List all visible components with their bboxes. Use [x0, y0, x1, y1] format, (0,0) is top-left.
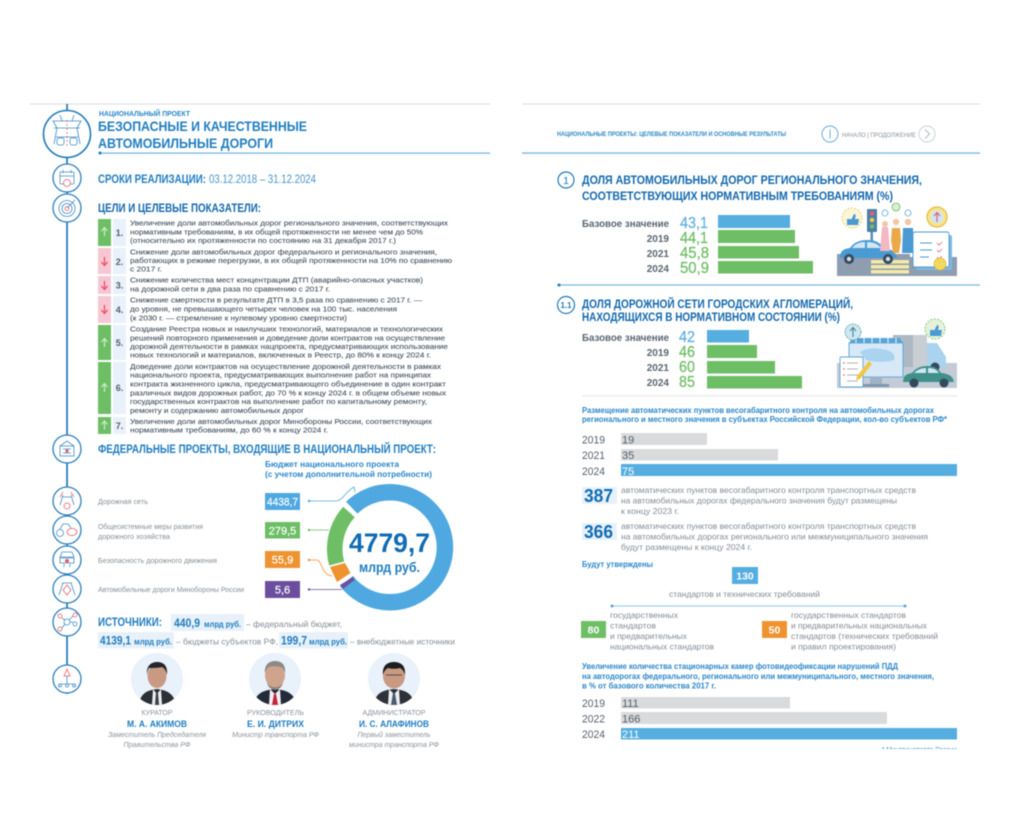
bar chart: weight control points: 75: [622, 466, 634, 478]
person caption: administrator: министра транспорта РФ: [349, 740, 439, 749]
federal project labels: Автомобильные дороги Минобороны России: [98, 586, 244, 594]
title: БЕЗОПАСНЫЕ И КАЧЕСТВЕННЫЕ: [98, 118, 307, 134]
icon: calendar: [53, 164, 81, 192]
implementation dates: 03.12.2018 – 31.12.2024: [209, 174, 316, 186]
donut chart: budget: [330, 492, 445, 602]
donut chart: budget: млрд руб.: [359, 559, 420, 575]
sources: млрд руб.: [134, 638, 172, 646]
federal project labels: [98, 499, 244, 594]
person caption: administrator: [349, 708, 439, 749]
goal 2: 2.: [116, 257, 123, 267]
budget heading: [265, 459, 432, 479]
title block: НАЦИОНАЛЬНЫЙ ПРОЕКТ: [99, 109, 190, 118]
person caption: head: Министр транспорта РФ: [232, 730, 319, 739]
section 1.1 heading: ДОЛЯ ДОРОЖНОЙ СЕТИ ГОРОДСКИХ АГЛОМЕРАЦИЙ,: [582, 298, 853, 311]
goal 6: ремонту и содержанию автомобильных дорог: [130, 406, 304, 415]
goal 1: [98, 219, 448, 246]
goal 2: Снижение доли автомобильных дорог федерального и регионального значения,: [130, 247, 437, 256]
goal 4: [98, 296, 423, 323]
section 1.1 heading: 1.1: [560, 301, 572, 310]
goal 4: Снижение смертности в результате ДТП в 3,5 раза по сравнению с 2017 г. —: [130, 296, 423, 305]
bar chart: urban agglomerations: 60: [679, 359, 695, 376]
bar chart: weight control points: 35: [622, 450, 634, 462]
person caption: head: Е. И. ДИТРИХ: [247, 719, 305, 730]
bar chart: cameras: 2019: [582, 698, 605, 710]
person caption: administrator: АДМИНИСТРАТОР: [362, 708, 426, 717]
weight control heading: Размещение автоматических пунктов весогабаритного контроля на автомобильных дорогах: [582, 406, 935, 415]
icon: road safety: [53, 546, 81, 574]
goal 7: [98, 417, 432, 435]
goal 6: Доведение доли контрактов на осуществление дорожной деятельности в рамках: [130, 362, 441, 371]
goal 6: государственных контрактов на выполнение работ по капитальному ремонту,: [130, 397, 427, 406]
bar chart: regional roads: 2024: [647, 264, 669, 275]
bar chart: weight control points: 2019: [582, 434, 605, 446]
budget value boxes: 55,9: [272, 554, 293, 566]
sources: – федеральный бюджет,: [246, 619, 342, 629]
bar chart: weight control points: [582, 433, 957, 478]
implementation dates: СРОКИ РЕАЛИЗАЦИИ:: [98, 174, 206, 186]
bar chart: cameras: 2024: [582, 729, 605, 741]
bar chart: urban agglomerations: 85: [679, 374, 695, 391]
budget value boxes: 5,6: [275, 584, 290, 596]
bar chart: cameras: 211: [622, 729, 640, 741]
sources: ИСТОЧНИКИ:: [98, 617, 162, 629]
stat: 387 points: 387: [584, 486, 613, 506]
budget heading: Бюджет национального проекта: [265, 459, 399, 469]
bar chart: urban agglomerations: [582, 329, 802, 391]
goal 3: на дорожной сети в два раза по сравнению с 2017 г.: [130, 285, 330, 294]
bar chart: urban agglomerations: 2024: [647, 378, 669, 389]
person caption: head: РУКОВОДИТЕЛЬ: [247, 708, 304, 717]
goal 6: контракта жизненного цикла, предусматривающего объединение в один контракт: [130, 380, 447, 389]
section 1 heading: 1: [563, 175, 569, 187]
sources: [98, 614, 455, 648]
implementation dates: [98, 174, 316, 186]
cameras heading: на автодорогах федерального, регионального или межмуниципального, местного значения,: [582, 672, 934, 681]
standards block: Будут утверждены: [582, 560, 653, 569]
icon: road roller: [53, 516, 81, 544]
budget value boxes: 4438,7: [267, 496, 298, 508]
budget value boxes: 279,5: [269, 526, 296, 538]
national standards count: 80: [588, 624, 599, 636]
goal 3: Снижение количества мест концентрации ДТП (аварийно-опасных участков): [130, 276, 423, 285]
icon: target: [53, 194, 81, 222]
cameras heading: в % от базового количества 2017 г.: [582, 682, 716, 690]
standards block: [581, 560, 938, 652]
goal 3: 3.: [116, 280, 123, 290]
cameras heading: Увеличение количества стационарных камер фотовидеофиксации нарушений ПДД: [582, 662, 898, 671]
icon: road: [44, 110, 90, 158]
goal 1: Увеличение доли автомобильных дорог регионального значения, соответствующих: [130, 219, 448, 228]
portrait: administrator: [368, 653, 420, 705]
bar chart: regional roads: 2019: [647, 234, 669, 245]
federal project labels: Дорожная сеть: [98, 499, 148, 506]
goal 4: 4.: [116, 305, 123, 315]
bar chart: weight control points: 2021: [582, 450, 605, 462]
icon: sources network: [53, 608, 81, 636]
federal projects heading: ФЕДЕРАЛЬНЫЕ ПРОЕКТЫ, ВХОДЯЩИЕ В НАЦИОНАЛЬНЫЙ ПРОЕКТ:: [98, 443, 436, 456]
bar chart: cameras: 166: [622, 714, 640, 726]
sources: 440,9: [174, 618, 200, 630]
stat: 366 points: будут размещены к концу 2024 г.: [621, 542, 752, 552]
portrait: curator: [131, 653, 183, 705]
national standards count: [581, 610, 715, 652]
goal 3: [98, 276, 423, 294]
bar chart: weight control points: 19: [622, 434, 634, 446]
bar chart: urban agglomerations: Базовое значение: [582, 333, 669, 344]
goal 5: решений повторного применения и доведение доли контрактов на осуществление: [130, 333, 445, 342]
cameras heading: [582, 662, 934, 690]
bar chart: regional roads: Базовое значение: [582, 219, 669, 230]
total value: 4779,7: [349, 528, 430, 558]
technical standards count: и предварительных национальных: [791, 620, 928, 630]
person caption: administrator: И. С. АЛАФИНОВ: [359, 719, 429, 730]
connectors: [308, 487, 355, 591]
person caption: administrator: Первый заместитель: [358, 730, 431, 739]
bar chart: urban agglomerations: 2021: [647, 363, 669, 374]
goal 2: работающих в режиме перегрузки, в их общей протяженности на 10% по сравнению: [130, 256, 452, 265]
bar chart: regional roads: [582, 215, 813, 277]
bar chart: cameras: 111: [622, 698, 639, 710]
bar chart: regional roads: 50,9: [680, 260, 709, 277]
section 1 heading: ДОЛЯ АВТОМОБИЛЬНЫХ ДОРОГ РЕГИОНАЛЬНОГО ЗНАЧЕНИЯ,: [582, 175, 922, 187]
sources: млрд руб.: [204, 620, 241, 629]
bar chart: regional roads: 43,1: [680, 215, 708, 232]
federal project labels: дорожного хозяйства: [98, 533, 170, 541]
divider: [559, 284, 980, 286]
footnote (cropped): [875, 747, 965, 757]
sources: – бюджеты субъектов РФ,: [176, 636, 278, 646]
sources: 4139,1: [100, 636, 132, 648]
icon: people hierarchy: [53, 665, 81, 693]
right page header: [522, 126, 980, 154]
sources: – внебюджетные источники: [350, 636, 455, 646]
section 1 heading: СООТВЕТСТВУЮЩИХ НОРМАТИВНЫМ ТРЕБОВАНИЯМ (%): [582, 191, 893, 203]
goal 4: до уровня, не превышающего четырех человек на 100 тыс. населения: [130, 305, 397, 314]
panel: goals table: [98, 219, 452, 435]
technical standards count: и правил проектирования): [791, 642, 896, 652]
right page header: НАЦИОНАЛЬНЫЕ ПРОЕКТЫ: ЦЕЛЕВЫЕ ПОКАЗАТЕЛИ И ОСНОВНЫЕ РЕЗУЛЬТАТЫ: [557, 132, 786, 138]
person caption: head: [232, 708, 319, 739]
bar chart: weight control points: 2024: [582, 466, 605, 478]
goal 4: (к 2030 г. — стремление к нулевому уровню смертности): [130, 313, 347, 322]
bar chart: cameras: [582, 697, 957, 741]
person caption: curator: КУРАТОР: [142, 708, 172, 717]
section 1 heading: [558, 172, 922, 203]
goal 7: нормативным требованиям, до 60 % к концу 2024 г.: [130, 426, 328, 435]
national standards count: и предварительных: [610, 631, 688, 641]
stat: 387 points: автоматических пунктов весогабаритного контроля транспортных средств: [621, 485, 917, 495]
goal 1: (относительно их протяженности по состоянию на 31 декабря 2017 г.): [130, 236, 396, 245]
stat: 366 points: 366: [584, 522, 613, 542]
goal 2: [98, 247, 452, 274]
national standards count: национальных стандартов: [610, 642, 715, 652]
technical standards count: стандартов (технических требований: [791, 631, 938, 641]
person caption: curator: М. А. АКИМОВ: [127, 719, 187, 730]
budget heading: (с учетом дополнительной потребности): [265, 469, 432, 479]
federal project labels: Безопасность дорожного движения: [98, 558, 217, 565]
stat: 387 points: [582, 485, 917, 516]
goal 2: с 2017 г.: [130, 265, 162, 274]
national standards count: стандартов: [610, 620, 657, 630]
goal 5: новых технологий и материалов, включенных в Реестр, до 80% к концу 2024 г.: [130, 351, 431, 360]
bar chart: regional roads: 45,8: [680, 245, 709, 262]
weight control heading: регионального и местного значения в субъектах Российской Федерации, кол-во субъектов РФ*: [582, 415, 948, 424]
person caption: curator: [108, 708, 206, 749]
illustration: monitoring scene: [837, 319, 957, 388]
stat: 366 points: автоматических пунктов весогабаритного контроля транспортных средств: [621, 521, 917, 531]
section 1.1 heading: [558, 296, 853, 324]
title: [98, 118, 307, 151]
bar chart: urban agglomerations: 46: [679, 344, 695, 361]
technical standards count: государственных стандартов: [791, 610, 907, 620]
goal 7: 7.: [116, 421, 123, 431]
title block: [98, 109, 490, 154]
standards block: 130: [736, 570, 754, 582]
title: АВТОМОБИЛЬНЫЕ ДОРОГИ: [98, 135, 273, 151]
goal 6: национального проекта, предусматривающих выполнение работ на принципах: [130, 371, 431, 380]
icon: defence roads: [53, 575, 81, 603]
footnote (cropped): * Минтранспорта России: [882, 747, 957, 754]
illustration: road safety scene: [837, 203, 957, 276]
timeline with icons: [44, 104, 90, 694]
bar chart: urban agglomerations: 2019: [647, 348, 669, 359]
technical standards count: 50: [769, 624, 780, 636]
bar chart: cameras: 2022: [582, 714, 605, 726]
goal 1: 1.: [116, 228, 123, 238]
stat: 366 points: [582, 521, 928, 552]
stat: 387 points: к концу 2023 г.: [621, 506, 679, 516]
goal 7: Увеличение доли автомобильных дорог Минобороны России, соответствующих: [130, 417, 432, 426]
portrait: head of project: [249, 653, 301, 705]
goal 5: [98, 324, 448, 360]
stat: 366 points: на автомобильных дорогах регионального или межмуниципального значения: [621, 532, 928, 542]
standards block: стандартов и технических требований: [669, 589, 820, 599]
goal 5: 5.: [116, 338, 123, 348]
weight control heading: [582, 406, 948, 424]
stat: 387 points: на автомобильных дорогах федерального значения будут размещены: [621, 496, 897, 506]
goal 6: 6.: [116, 383, 123, 393]
federal project labels: Общесистемные меры развития: [98, 523, 203, 531]
budget value boxes: [265, 493, 300, 598]
person caption: curator: Правительства РФ: [124, 740, 191, 749]
icon: federal projects: [53, 435, 81, 463]
goal 1: нормативным требованиям, в их общей протяженности не менее чем до 50%: [130, 227, 423, 236]
section 1.1 heading: НАХОДЯЩИХСЯ В НОРМАТИВНОМ СОСТОЯНИИ (%): [582, 312, 840, 324]
national standards count: государственных: [610, 610, 679, 620]
bar chart: urban agglomerations: 42: [679, 329, 695, 346]
goal 6: различных видов дорожных работ, до 70 % к концу 2024 г. в общем объеме новых: [130, 388, 446, 397]
person caption: curator: Заместитель Председателя: [108, 730, 206, 739]
goal 5: Создание Реестра новых и наилучших технологий, материалов и технологических: [130, 324, 443, 333]
bar chart: regional roads: 2021: [647, 249, 669, 260]
goal 6: [98, 362, 447, 415]
technical standards count: [762, 610, 938, 652]
goal 5: дорожной деятельности в рамках нацпроекта, предусматривающих использование: [130, 342, 448, 351]
icon: road network: [53, 487, 81, 515]
right page header: НАЧАЛО | ПРОДОЛЖЕНИЕ: [842, 132, 917, 139]
sources: 199,7: [281, 636, 307, 648]
sources: млрд руб.: [309, 638, 347, 646]
bar chart: regional roads: 44,1: [680, 230, 708, 247]
goals heading: ЦЕЛИ И ЦЕЛЕВЫЕ ПОКАЗАТЕЛИ:: [98, 203, 261, 215]
